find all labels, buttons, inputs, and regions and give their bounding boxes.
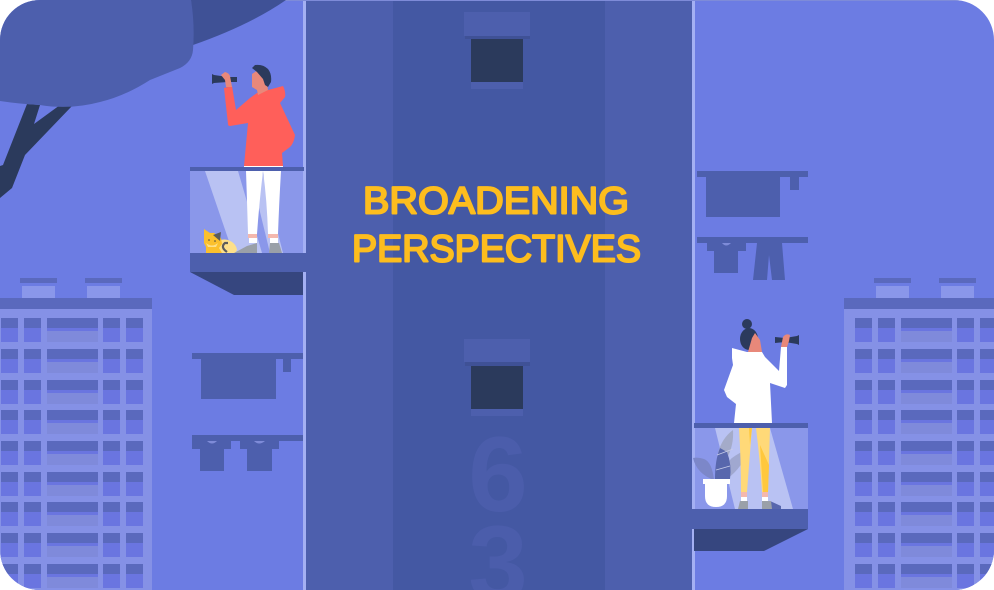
- right apartment building: [844, 278, 994, 590]
- tree: [0, 0, 286, 198]
- tower number 63: [468, 414, 528, 590]
- woman hoodie: [724, 347, 787, 423]
- cat: [204, 229, 237, 253]
- man with binoculars: [212, 65, 295, 253]
- man legs: [234, 171, 282, 253]
- man hoodie: [224, 86, 295, 166]
- tower window: top: [464, 12, 530, 89]
- laundry: right: [697, 171, 808, 280]
- title: BROADENING: [363, 180, 629, 222]
- man head: [252, 65, 271, 95]
- tower window: bottom: [464, 339, 530, 416]
- woman head: [740, 319, 762, 352]
- tower number 63: 6: [468, 414, 528, 534]
- left apartment building: [0, 278, 152, 590]
- woman binoculars and hand: [775, 334, 799, 347]
- woman with binoculars: [724, 319, 799, 509]
- man binoculars and hand: [212, 72, 237, 87]
- title: [354, 186, 640, 263]
- title: PERSPECTIVES: [352, 228, 641, 270]
- potted plant: [693, 430, 740, 507]
- left balcony: [190, 167, 306, 295]
- laundry: left: [192, 353, 303, 471]
- right balcony: [692, 423, 808, 551]
- woman legs: [738, 428, 781, 509]
